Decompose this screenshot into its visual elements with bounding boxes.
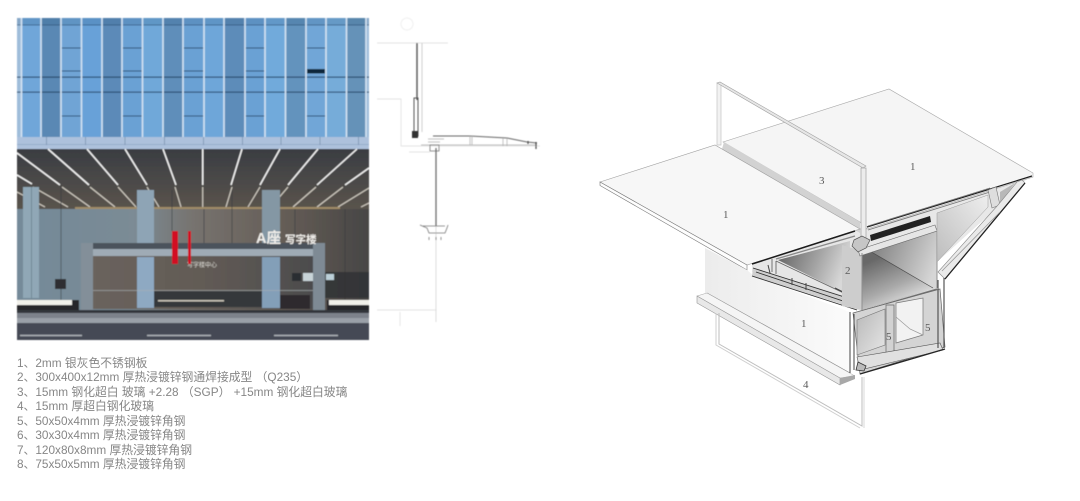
materials list: 2、300x400x12mm 厚热浸镀锌钢通焊接成型 （Q235）: [17, 370, 308, 384]
model: upper right plate: [723, 89, 1033, 229]
model: left plate: [600, 145, 860, 270]
photo: building sign: [256, 229, 317, 247]
materials list: 1、2mm 银灰色不锈钢板: [17, 356, 147, 370]
model: label 5 left: 5: [886, 331, 892, 343]
section: faint outline: [377, 43, 540, 326]
section drawing: [377, 18, 540, 326]
model: right bracket: [937, 180, 1025, 279]
model: label 1 left plate: 1: [723, 209, 728, 221]
materials list: 3、15mm 钢化超白 玻璃 +2.28 （SGP） +15mm 钢化超白玻璃: [17, 385, 347, 399]
materials list: [17, 356, 347, 471]
photo: lobby glass: [17, 187, 369, 313]
model: label 3: 3: [819, 175, 825, 187]
model: label 1 upper plate: 1: [910, 161, 916, 173]
photo: building entrance: [17, 18, 369, 340]
photo: building sign: 写字楼: [285, 233, 317, 246]
photo: soffit band: [17, 137, 369, 149]
model: lower steel frame: [850, 278, 945, 374]
model: lower lip: [697, 293, 855, 385]
model: gutter strip: [722, 142, 860, 233]
model: label 2: 2: [845, 265, 850, 277]
model: lower vertical panel: [705, 248, 850, 373]
materials list: 4、15mm 厚超白钢化玻璃: [17, 399, 154, 413]
3D canopy model: [600, 82, 1033, 428]
section: glass hanger: [420, 148, 448, 322]
photo: building sign: A座: [256, 229, 281, 247]
photo: ceiling with light lines: [17, 149, 369, 209]
model: underside backing: [842, 176, 1030, 311]
photo: columns: [23, 187, 280, 308]
materials list: 7、120x80x8mm 厚热浸镀锌角钢: [17, 443, 192, 457]
model: label 1 lower panel: 1: [801, 318, 806, 330]
model: label 4: 4: [803, 379, 809, 391]
photo: lobby logo: 写字楼中心: [187, 261, 217, 269]
photo: planters: [17, 300, 369, 313]
model: upper glass rail: [717, 82, 866, 241]
photo: lobby interior: [55, 272, 369, 309]
photo: glass facade: [17, 18, 369, 137]
model: box beam: [842, 188, 990, 311]
materials list: 8、75x50x5mm 厚热浸镀锌角钢: [17, 457, 185, 471]
model: lower glass pane: [716, 313, 864, 428]
photo: pavement and road: [17, 310, 369, 340]
section: facade mullion: [412, 43, 422, 138]
materials list: 5、50x50x4mm 厚热浸镀锌角钢: [17, 414, 185, 428]
photo: red bars: [172, 231, 191, 264]
model: label 5 right: 5: [925, 322, 931, 334]
materials list: 6、30x30x4mm 厚热浸镀锌角钢: [17, 428, 185, 442]
model: left cavity interior: [752, 231, 857, 310]
section: reference circle: [401, 18, 413, 30]
photo: entrance canopy: [81, 243, 325, 310]
section: canopy outrigger: [421, 136, 537, 151]
